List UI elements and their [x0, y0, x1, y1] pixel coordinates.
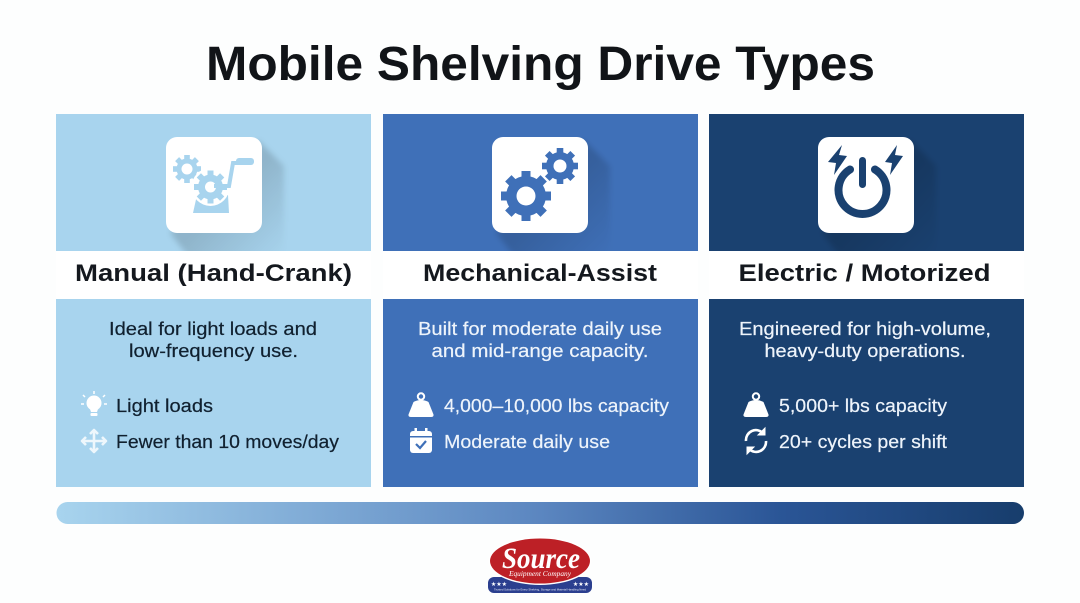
- icon: light bulb: [81, 391, 107, 416]
- icon: hand crank with gears: [166, 137, 284, 256]
- description: [418, 319, 662, 361]
- logo: Source Equipment Company: Equipment Company: [508, 570, 572, 578]
- description: heavy-duty operations.: [764, 341, 966, 361]
- feature: capacity: 4,000–10,000 lbs capacity: [444, 395, 670, 416]
- title: Mobile Shelving Drive Types: [206, 38, 875, 91]
- logo: Source Equipment Company: Trusted Solutions for Every Shelving, Storage and Material Handling Need: [494, 588, 586, 592]
- description: low-frequency use.: [129, 341, 298, 361]
- icon: power button with lightning: [818, 137, 936, 256]
- description: and mid-range capacity.: [432, 341, 648, 361]
- icon: move arrows: [82, 430, 106, 452]
- logo: Source Equipment Company: ★★★: [573, 581, 589, 588]
- panel: electric / motorized: [709, 114, 1024, 487]
- gradient scale bar: [56, 502, 1024, 524]
- description: Engineered for high-volume,: [739, 319, 991, 339]
- logo: Source Equipment Company: [488, 537, 592, 593]
- feature: capacity: 5,000+ lbs capacity: [779, 395, 948, 416]
- panel: mechanical-assist: [383, 114, 698, 487]
- icon: weight: [408, 393, 434, 417]
- feature: daily use: Moderate daily use: [444, 431, 610, 452]
- description: [109, 319, 317, 361]
- icon: gears: [492, 137, 610, 256]
- feature: moves per day: Fewer than 10 moves/day: [116, 431, 340, 452]
- description: Built for moderate daily use: [418, 319, 662, 339]
- panel heading: Mechanical-Assist: [423, 260, 657, 287]
- feature: light loads: Light loads: [116, 395, 213, 416]
- feature: cycles per shift: 20+ cycles per shift: [779, 431, 947, 452]
- icon: cycle arrows: [746, 428, 766, 454]
- panel: manual hand-crank: [56, 114, 371, 487]
- description: Ideal for light loads and: [109, 319, 317, 339]
- panel heading: Electric / Motorized: [738, 260, 990, 287]
- description: [739, 319, 991, 361]
- logo: Source Equipment Company: Source: [502, 542, 580, 575]
- icon: calendar check: [410, 428, 432, 453]
- logo: Source Equipment Company: ★★★: [491, 581, 507, 588]
- panel heading: Manual (Hand-Crank): [75, 260, 352, 287]
- icon: weight: [743, 393, 769, 417]
